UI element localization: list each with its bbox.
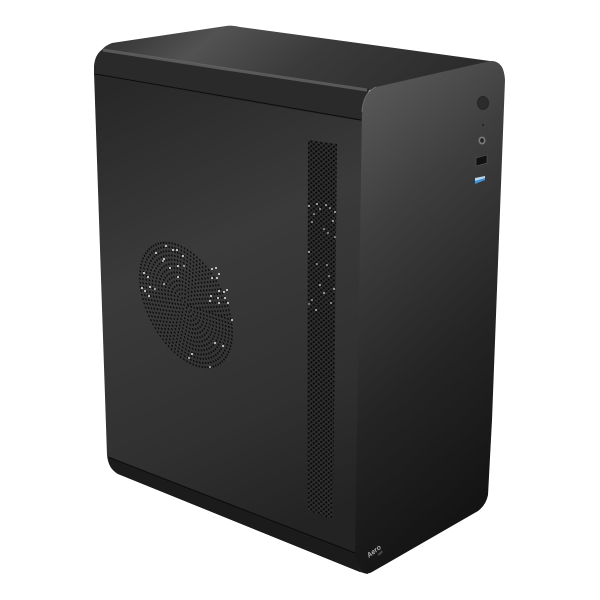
top panel [101, 26, 500, 91]
top bevel lip [94, 49, 370, 121]
front panel left edge [362, 87, 376, 112]
audio jack [478, 136, 486, 144]
bottom seam [108, 457, 355, 553]
logo: Aerocool: cool [377, 550, 384, 556]
power button [478, 96, 488, 110]
top seam [95, 74, 361, 120]
side panel [94, 49, 372, 574]
USB 2.0 port [476, 155, 487, 166]
LED [482, 124, 484, 126]
USB 3.0 port [475, 177, 485, 184]
logo: Aerocool: Aero [365, 544, 383, 560]
logo: Aerocool [365, 544, 385, 563]
vent strip [307, 140, 337, 520]
fan highlights [141, 245, 233, 368]
vent highlights [308, 203, 336, 311]
side fan grille [131, 230, 241, 380]
lip highlight [103, 50, 367, 90]
bottom strip [108, 457, 360, 572]
front panel [355, 61, 505, 574]
